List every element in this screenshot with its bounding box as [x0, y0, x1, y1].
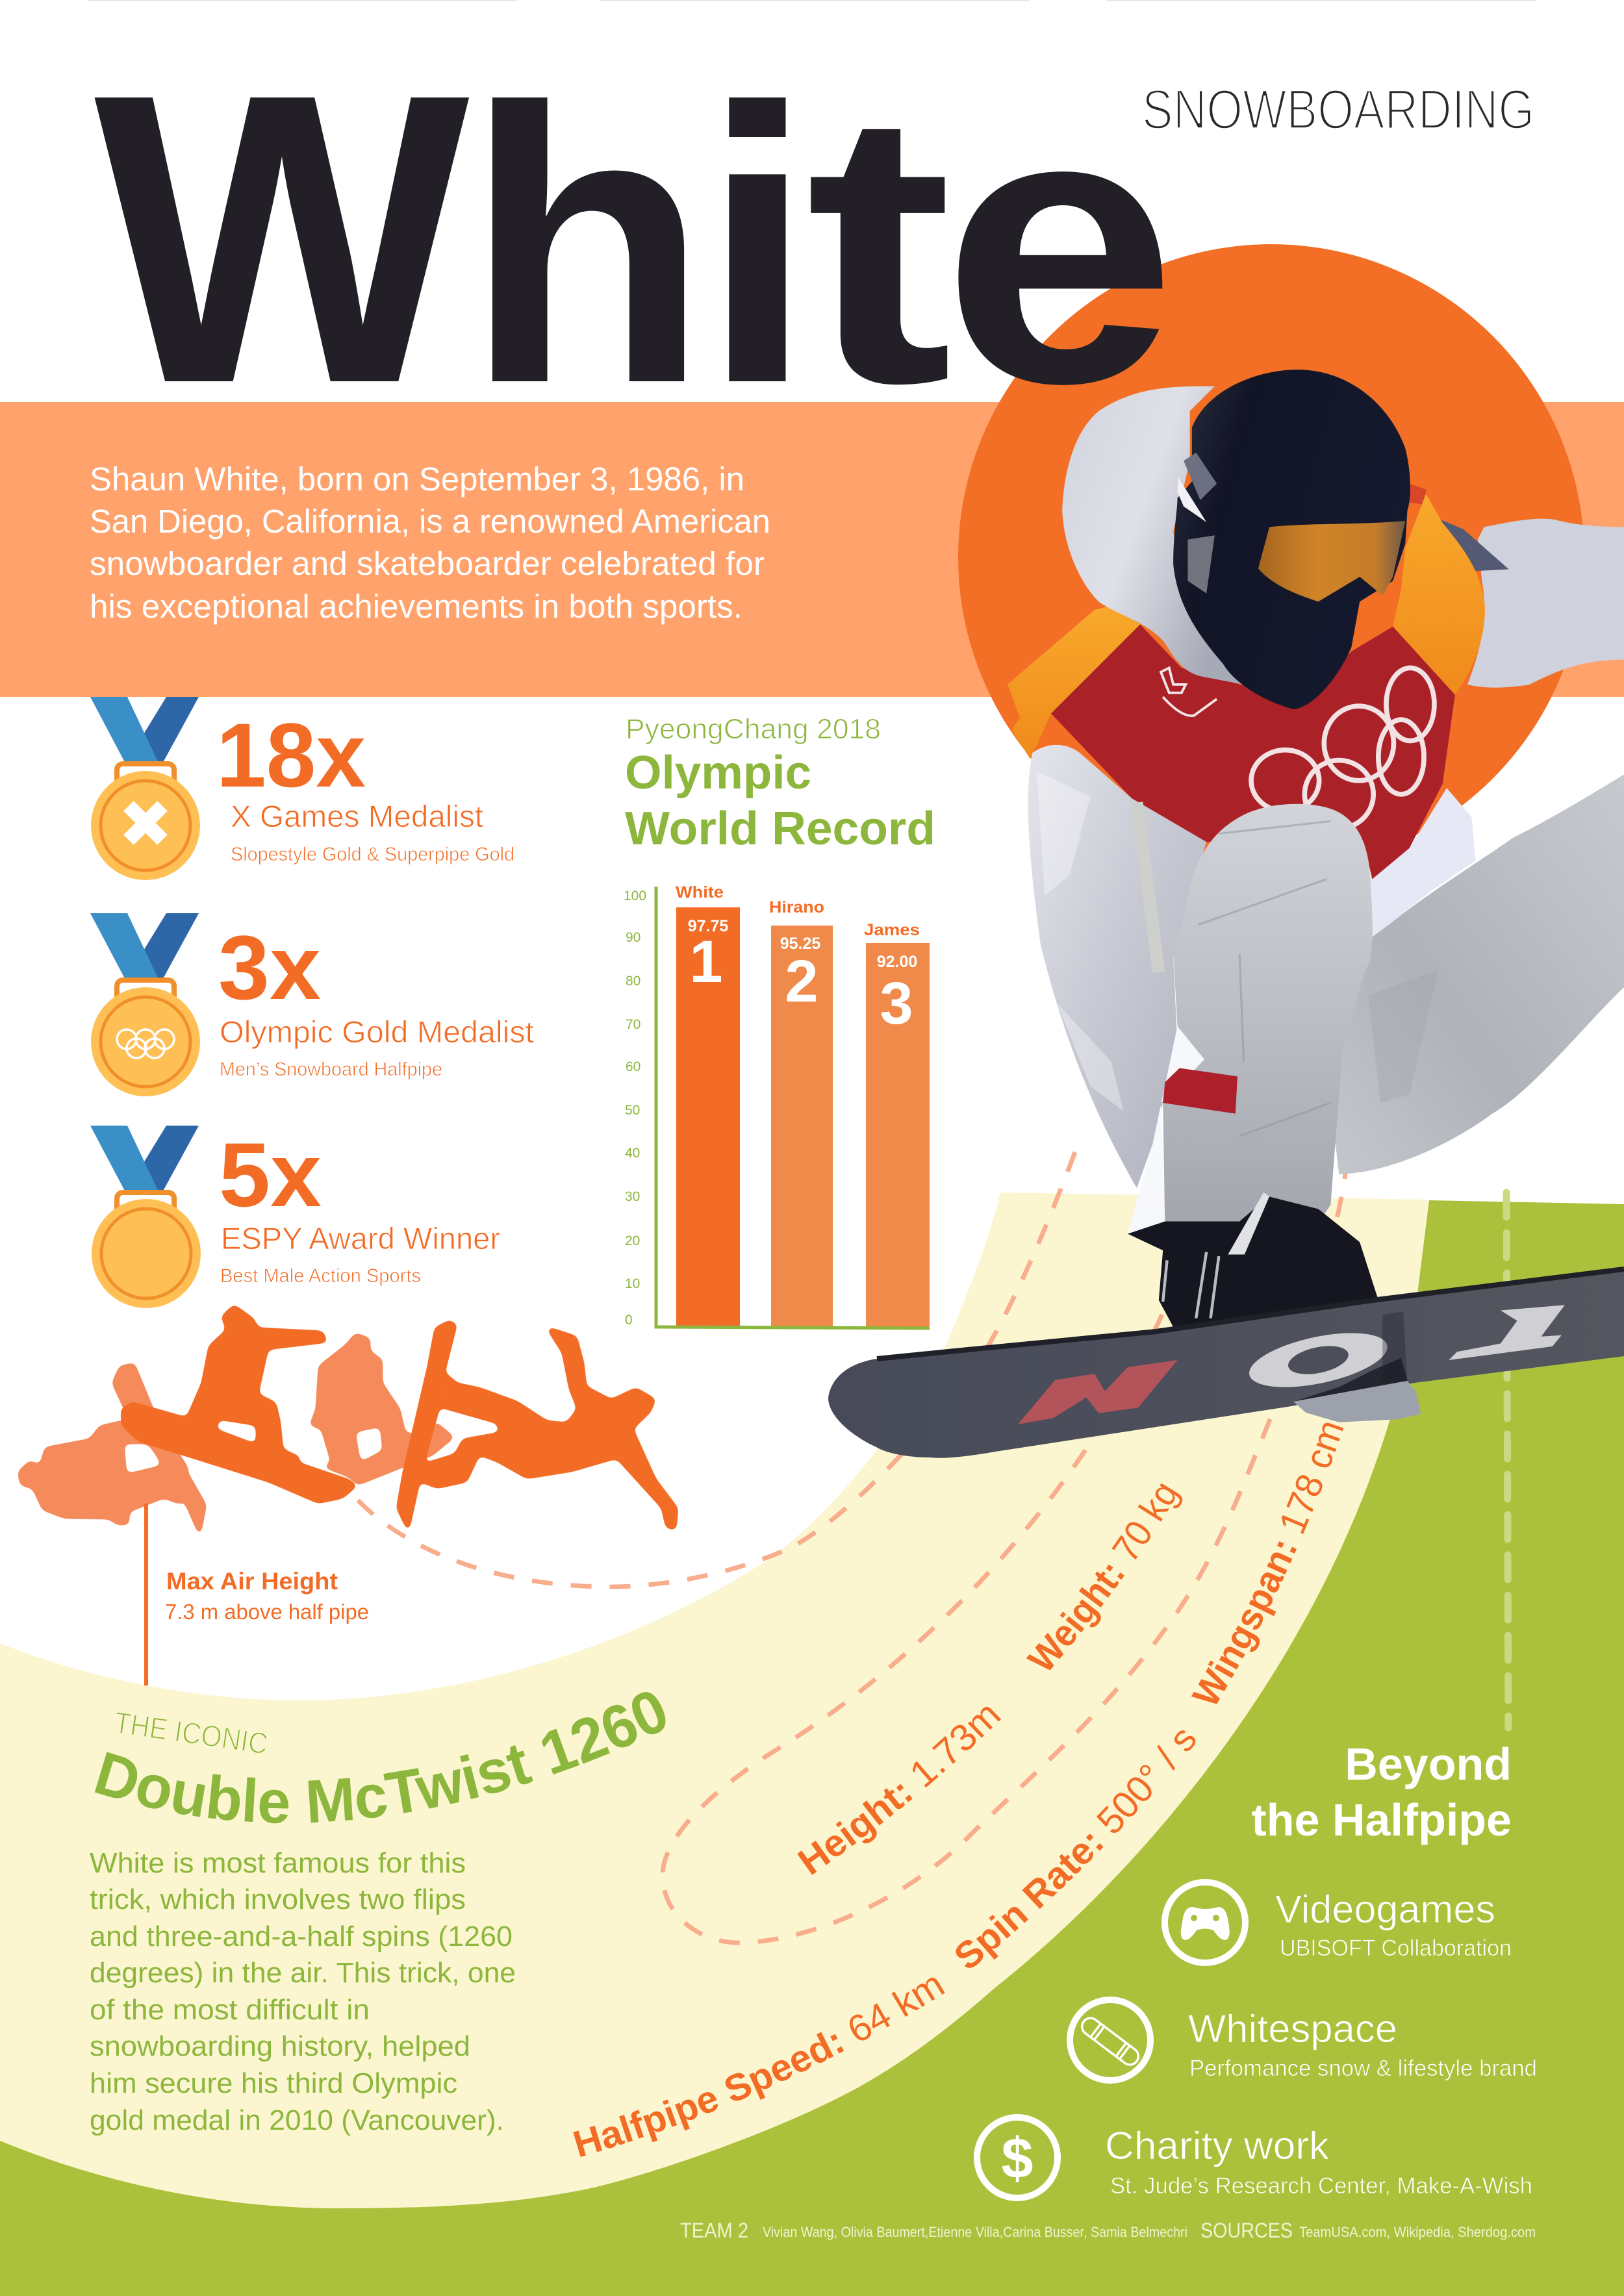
wrist shadow	[1382, 1311, 1408, 1383]
bar chart: 3	[880, 970, 913, 1037]
X Games text	[216, 704, 514, 865]
snowboard pictogram on bib	[1161, 668, 1217, 716]
title: e	[942, 29, 1177, 464]
snowboarder figure	[828, 370, 1624, 1458]
red collar sliver	[1408, 484, 1427, 504]
Charity text: St. Jude’s Research Center, Make-A-Wish	[1110, 2173, 1532, 2199]
right orange shoulder	[1393, 494, 1485, 695]
Whitespace text: Whitespace	[1188, 2007, 1397, 2050]
trick description: him secure his third Olympic	[90, 2067, 457, 2099]
chart heading	[625, 713, 935, 855]
Charity text	[1105, 2124, 1532, 2199]
intro text: Shaun White, born on September 3, 1986, in	[90, 460, 744, 498]
hand	[1293, 1381, 1421, 1422]
bar chart: 90	[626, 930, 641, 945]
body stats along curves: Height: 1.73m	[797, 1707, 1001, 1875]
flag patch	[1438, 519, 1509, 571]
bar chart: Hirano	[769, 898, 824, 916]
item: Videogames	[1165, 1882, 1512, 1963]
trick description: gold medal in 2010 (Vancouver).	[90, 2104, 504, 2136]
footer credits	[680, 2219, 1536, 2242]
helmet side band	[1184, 453, 1217, 500]
stat: X Games	[90, 697, 514, 880]
arm highlights	[1037, 772, 1124, 1111]
left arm	[1028, 745, 1206, 1188]
chart heading: World Record	[625, 803, 935, 855]
chart heading: Olympic	[625, 747, 811, 799]
title: h	[464, 27, 709, 465]
Charity text: Charity work	[1105, 2124, 1330, 2167]
icon: X Games medal	[90, 697, 200, 880]
ESPY text	[219, 1124, 500, 1287]
cuff white strip	[1128, 1026, 1204, 1234]
cream halfpipe shape	[0, 1192, 1428, 2208]
title: W	[94, 8, 473, 469]
Olympic text: 3x	[218, 916, 321, 1018]
silhouette: dark rider with board	[121, 1304, 358, 1504]
right leg	[1331, 772, 1624, 1174]
subtitle: SNOWBOARDING	[1142, 79, 1534, 141]
X Games text: 18x	[216, 704, 366, 806]
X Games text: X Games Medalist	[231, 799, 483, 833]
bar chart: 20	[625, 1233, 640, 1248]
trick description: White is most famous for this	[90, 1847, 466, 1879]
board letter O	[1245, 1323, 1392, 1398]
intro text: San Diego, California, is a renowned American	[90, 503, 770, 540]
air height text: 7.3 m above half pipe	[165, 1600, 369, 1624]
trick description: snowboarding history, helped	[90, 2030, 470, 2062]
trick heading: Double McTwist 1260	[95, 1692, 665, 1824]
item: Whitespace	[1070, 2000, 1537, 2081]
body shapes	[1008, 370, 1624, 1327]
icon: snowboard	[1070, 2000, 1150, 2080]
bar chart	[624, 883, 930, 1328]
icon: ESPY medal	[90, 1126, 201, 1308]
Videogames text	[1275, 1887, 1512, 1961]
title: i	[700, 27, 815, 465]
leg crease shading	[1368, 970, 1438, 1103]
ESPY text: ESPY Award Winner	[221, 1221, 500, 1255]
trick description: of the most difficult in	[90, 1994, 370, 2026]
bar chart: 50	[625, 1103, 640, 1118]
air height text: Max Air Height	[166, 1568, 338, 1595]
beyond heading: Beyond	[1345, 1739, 1512, 1789]
dashed guide on green	[1506, 1192, 1508, 1728]
hood puff	[1062, 386, 1244, 685]
icon: dollar: $	[1002, 2126, 1033, 2190]
icon: dollar	[977, 2117, 1058, 2198]
bar chart: 2	[785, 948, 818, 1015]
board letter N	[1018, 1360, 1178, 1424]
orange circle	[958, 244, 1584, 870]
green ground shape	[0, 1200, 1624, 2296]
body stats along curves: Weight: 70 kg	[1026, 1483, 1182, 1671]
bar chart: 95.25	[780, 935, 820, 953]
icon: game controller	[1165, 1882, 1245, 1963]
goggles	[1258, 521, 1405, 601]
dashed trajectory lines	[358, 1137, 1345, 1943]
stat: ESPY	[90, 1124, 500, 1308]
silhouette: light middle rider	[309, 1333, 455, 1485]
title: t	[806, 32, 952, 464]
mask detail	[1187, 535, 1215, 594]
helmet and mask	[1173, 370, 1410, 709]
trick description: trick, which involves two flips	[90, 1884, 466, 1915]
air height text	[165, 1568, 369, 1624]
Videogames text: UBISOFT Collaboration	[1280, 1936, 1512, 1961]
intro band	[0, 402, 1624, 697]
air height marker line	[144, 1504, 148, 1685]
left orange shoulder	[1008, 606, 1140, 759]
zipper	[1137, 803, 1159, 972]
intro text: snowboarder and skateboarder celebrated for	[90, 545, 765, 582]
silhouette: light left rider	[18, 1363, 207, 1538]
bar chart: 100	[624, 889, 646, 903]
strap	[1228, 1192, 1269, 1254]
Videogames text: Videogames	[1275, 1887, 1495, 1931]
chart heading: PyeongChang 2018	[626, 713, 881, 745]
item: Charity work	[977, 2117, 1532, 2199]
body stats along curves	[573, 1422, 1343, 2157]
block folds	[1198, 821, 1331, 1136]
bar chart: James	[864, 921, 920, 939]
stat: Olympic gold	[90, 913, 534, 1096]
beyond heading	[1251, 1739, 1512, 1845]
snowboarder silhouettes	[18, 1304, 678, 1538]
snowboard	[828, 1269, 1624, 1458]
bar chart: 60	[626, 1059, 641, 1074]
bar chart: 10	[625, 1276, 640, 1291]
footer credits: SOURCES	[1200, 2219, 1293, 2242]
board graphics	[1018, 1305, 1565, 1424]
red bib	[1051, 624, 1455, 879]
icon: Olympic medal	[90, 913, 200, 1096]
intro text	[90, 460, 770, 625]
Olympic text: Olympic Gold Medalist	[220, 1015, 534, 1049]
right arm	[1467, 519, 1624, 688]
footer credits: Vivian Wang, Olivia Baumert,Etienne Villa,Carina Busser, Samia Belmechri	[763, 2224, 1187, 2240]
trick heading: THE ICONIC	[112, 1705, 270, 1761]
boot buckles	[1163, 1252, 1219, 1318]
bar chart: 40	[625, 1146, 640, 1161]
under-bib jacket	[1368, 788, 1476, 937]
bar chart: White	[676, 883, 724, 902]
Olympic rings on bib	[1251, 668, 1434, 828]
footer credits: TEAM 2	[680, 2219, 748, 2242]
bar chart: 97.75	[688, 917, 728, 935]
grey pant block	[1163, 804, 1373, 1225]
bar chart: 92.00	[877, 953, 917, 971]
beyond heading: the Halfpipe	[1251, 1795, 1512, 1845]
footer credits: TeamUSA.com, Wikipedia, Sherdog.com	[1299, 2224, 1536, 2240]
bar chart: 0	[625, 1313, 633, 1328]
Olympic text	[218, 916, 534, 1080]
body stats along curves: Wingspan: 178 cm	[1191, 1422, 1343, 1704]
boot	[1128, 1196, 1378, 1327]
Olympic text: Men’s Snowboard Halfpipe	[220, 1059, 442, 1080]
bar chart: 70	[626, 1017, 641, 1032]
bar chart: 80	[626, 974, 641, 989]
Whitespace text	[1188, 2007, 1537, 2081]
intro text: his exceptional achievements in both sports.	[90, 588, 742, 625]
red leg patch	[1163, 1068, 1237, 1114]
body stats along curves: Halfpipe Speed: 64 km	[573, 1977, 945, 2157]
title	[94, 8, 1177, 469]
ESPY text: Best Male Action Sports	[220, 1265, 421, 1287]
trick description: degrees) in the air. This trick, one	[90, 1957, 516, 1989]
silhouette: dark inverted rider	[396, 1320, 678, 1533]
board letter T	[1449, 1305, 1565, 1360]
bar chart: 1	[689, 929, 723, 995]
trick description	[90, 1847, 516, 2136]
palm shadow	[1293, 1358, 1408, 1402]
body stats along curves: Spin Rate: 500° / s	[956, 1730, 1195, 1968]
Whitespace text: Perfomance snow & lifestyle brand	[1189, 2056, 1537, 2081]
bar chart: 30	[625, 1189, 640, 1204]
visor highlight	[1178, 477, 1206, 522]
ESPY text: 5x	[219, 1124, 322, 1226]
trick description: and three-and-a-half spins (1260	[90, 1921, 513, 1952]
X Games text: Slopestyle Gold & Superpipe Gold	[231, 844, 514, 865]
